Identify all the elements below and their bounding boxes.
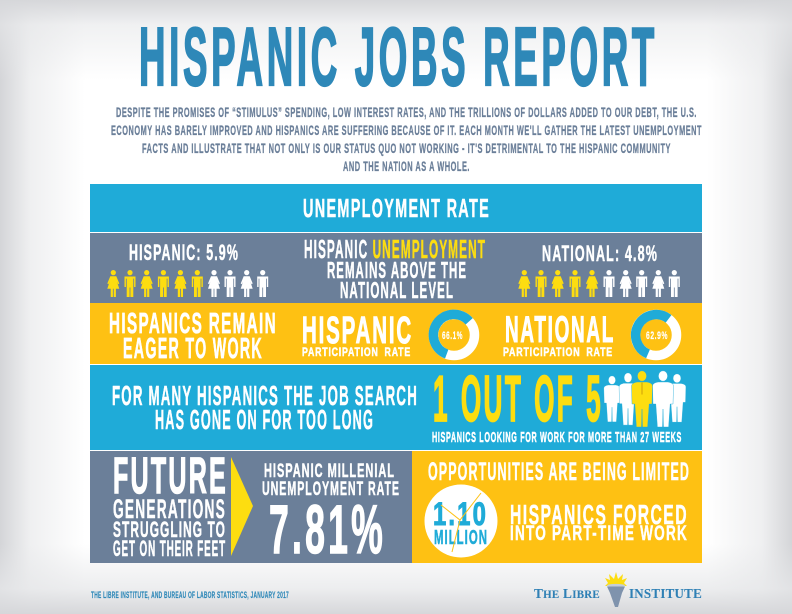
heading: forced part-time bbox=[510, 499, 688, 545]
panel: future generations bbox=[90, 447, 412, 568]
heading: future generations bbox=[113, 447, 228, 561]
millennial rate label bbox=[262, 461, 400, 500]
statistic: 7.81%: 7.81% bbox=[269, 491, 386, 568]
intro text: AND THE NATION AS A WHOLE. bbox=[343, 159, 470, 174]
arrow bbox=[231, 457, 253, 556]
heading: eager to work: HISPANICS REMAIN bbox=[109, 308, 277, 340]
source note: THE LIBRE INSTITUTE, AND BUREAU OF LABOR STATISTICS, JANUARY 2017 bbox=[91, 590, 289, 601]
millennial rate label: UNEMPLOYMENT RATE bbox=[262, 479, 400, 500]
logo: the libre institute: INSTITUTE bbox=[629, 587, 702, 602]
badge: 1.10 million: MILLION bbox=[434, 527, 488, 549]
hispanic participation label: PARTICIPATION RATE bbox=[302, 345, 411, 359]
panel: participation bbox=[90, 303, 702, 365]
center message: HISPANIC UNEMPLOYMENT bbox=[304, 234, 486, 264]
logo: the libre institute bbox=[534, 572, 702, 607]
chart: national participation donut bbox=[636, 314, 676, 356]
panel: job search bbox=[90, 362, 702, 450]
national participation label: NATIONAL bbox=[505, 309, 615, 350]
intro text bbox=[111, 105, 702, 174]
panel: future generations: FUTURE bbox=[113, 447, 228, 504]
national rate label: NATIONAL: 4.8% bbox=[542, 241, 658, 266]
hispanic participation label: HISPANIC bbox=[302, 310, 413, 352]
panel: opportunities limited bbox=[412, 451, 702, 563]
badge: 1.10 million bbox=[424, 484, 498, 558]
icon: hispanic people row bbox=[107, 270, 268, 297]
heading: forced part-time: INTO PART-TIME WORK bbox=[510, 522, 688, 545]
center message: NATIONAL LEVEL bbox=[340, 277, 454, 303]
panel: unemployment comparison bbox=[90, 233, 702, 303]
panel: job search: FOR MANY HISPANICS THE JOB SEARCH bbox=[112, 380, 418, 411]
panel: unemployment rate header bbox=[90, 184, 702, 232]
center message bbox=[304, 234, 486, 303]
heading: job search bbox=[112, 380, 418, 435]
heading: future generations: GENERATIONS bbox=[113, 494, 226, 524]
hispanic rate label: HISPANIC: 5.9% bbox=[129, 240, 239, 265]
icon: torch bbox=[605, 572, 627, 607]
heading: future generations: STRUGGLING TO bbox=[113, 517, 226, 542]
national participation label bbox=[503, 309, 615, 359]
icon: national people row bbox=[518, 270, 680, 297]
chart: national participation donut: 62.9% bbox=[646, 330, 668, 342]
icon: five business people bbox=[604, 371, 686, 427]
chart: hispanic participation donut bbox=[433, 314, 474, 356]
millennial rate label: HISPANIC MILLENIAL bbox=[264, 461, 395, 482]
center message: REMAINS ABOVE THE bbox=[327, 257, 467, 283]
chart: hispanic participation donut: 66.1% bbox=[442, 330, 463, 342]
heading: eager to work: EAGER TO WORK bbox=[123, 333, 263, 365]
national participation label: PARTICIPATION RATE bbox=[503, 345, 613, 359]
heading: job search: HAS GONE ON FOR TOO LONG bbox=[155, 404, 374, 435]
hispanic participation label bbox=[302, 310, 413, 359]
panel: future generations: GET ON THEIR FEET bbox=[113, 536, 226, 561]
heading: unemployment rate: UNEMPLOYMENT RATE bbox=[303, 193, 490, 223]
logo: the libre institute: THE LIBRE bbox=[534, 587, 600, 602]
badge: 1.10 million: 1.10 bbox=[433, 496, 488, 532]
heading: eager to work bbox=[109, 308, 277, 365]
